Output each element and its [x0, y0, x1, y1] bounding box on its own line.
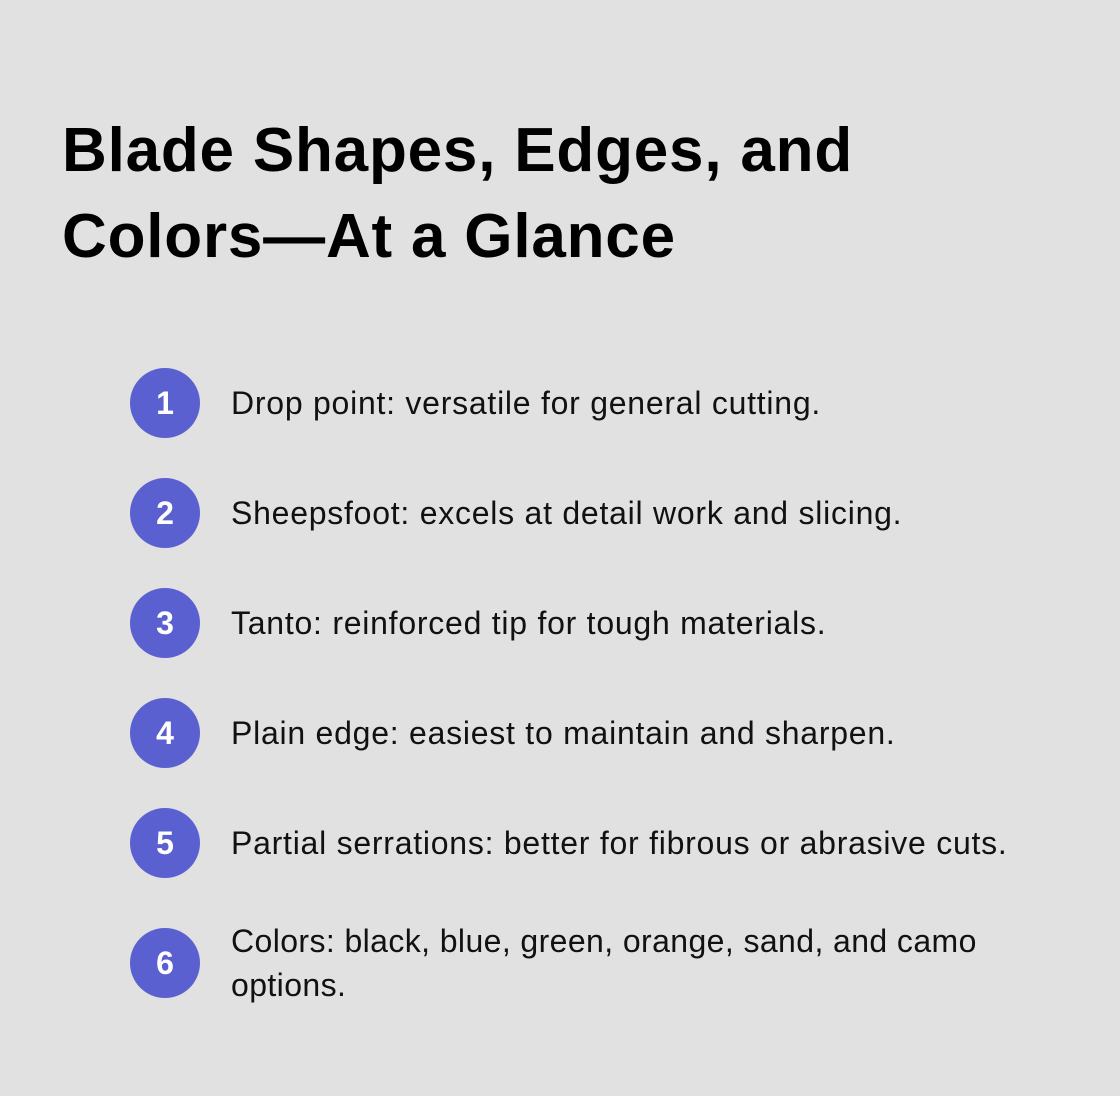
- item 2: Sheepsfoot: excels at detail work and slicing.: [231, 495, 902, 531]
- title: Colors—At a Glance: [62, 202, 676, 271]
- item 2: 2: [156, 495, 174, 531]
- item 3: Tanto: reinforced tip for tough materials.: [231, 605, 826, 641]
- title: [62, 116, 853, 271]
- item 4: 4: [156, 715, 174, 751]
- item 6: [130, 923, 977, 1003]
- item 2: [130, 478, 902, 548]
- item 4: Plain edge: easiest to maintain and sharpen.: [231, 715, 896, 751]
- item 6: 6: [156, 945, 174, 981]
- title: Blade Shapes, Edges, and: [62, 116, 853, 185]
- item 1: [130, 368, 821, 438]
- item 6: Colors: black, blue, green, orange, sand, and camo: [231, 923, 977, 959]
- item 5: Partial serrations: better for fibrous or abrasive cuts.: [231, 825, 1008, 861]
- item 1: Drop point: versatile for general cutting.: [231, 385, 821, 421]
- item 3: 3: [156, 605, 174, 641]
- item 5: 5: [156, 825, 174, 861]
- item 4: [130, 698, 896, 768]
- item 5: [130, 808, 1008, 878]
- item 3: [130, 588, 826, 658]
- item 6: options.: [231, 967, 346, 1003]
- item 1: 1: [156, 385, 174, 421]
